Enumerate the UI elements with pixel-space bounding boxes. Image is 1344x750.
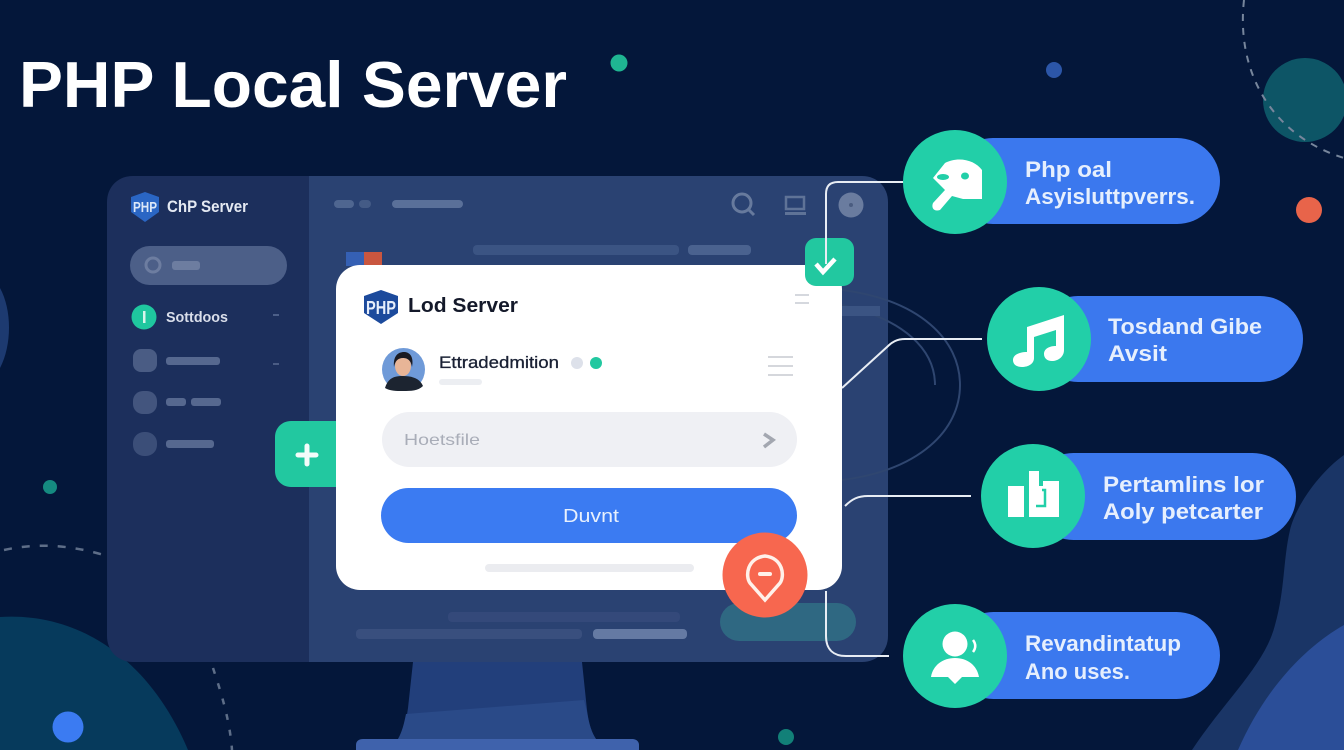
sidebar active item: Sottdoos bbox=[166, 310, 228, 326]
dialog header bbox=[364, 290, 809, 324]
dialog header: Lod Server bbox=[408, 294, 518, 317]
feature pill 3 bbox=[981, 444, 1296, 548]
sidebar brand: ChP Server bbox=[167, 198, 249, 216]
input field bbox=[382, 412, 797, 467]
sidebar search pill bbox=[130, 246, 287, 285]
feature pill 3: Pertamlins lor bbox=[1103, 472, 1264, 497]
top bar placeholders bbox=[334, 200, 751, 255]
bottom placeholders bbox=[356, 603, 856, 641]
sidebar active item bbox=[132, 304, 279, 330]
feature pill 4 bbox=[903, 604, 1220, 708]
feature pill 1: Asyisluttpverrs. bbox=[1025, 184, 1195, 209]
main dialog card bbox=[336, 265, 842, 590]
feature pill 1 bbox=[903, 130, 1220, 234]
warning badge bbox=[722, 532, 808, 618]
feature pill 2: Tosdand Gibe bbox=[1108, 314, 1262, 339]
background circle behind dialog bbox=[842, 290, 960, 480]
feature pill 2 bbox=[987, 287, 1303, 391]
plus badge bbox=[275, 421, 336, 487]
feature pill 2: Avsit bbox=[1108, 341, 1168, 366]
monitor stand bbox=[356, 662, 639, 750]
connector lines bbox=[826, 182, 982, 656]
monitor window bbox=[107, 176, 960, 662]
sidebar brand: PHP bbox=[133, 199, 157, 216]
feature pill 1: Php oal bbox=[1025, 157, 1112, 182]
check badge bbox=[805, 238, 854, 286]
sidebar brand bbox=[131, 192, 249, 222]
dialog header: PHP bbox=[366, 298, 396, 318]
input field: Hoetsfile bbox=[404, 432, 480, 449]
top bar icons bbox=[733, 192, 864, 218]
background window tabs bbox=[346, 252, 382, 266]
primary button bbox=[381, 488, 797, 543]
user row bbox=[382, 348, 793, 391]
primary button: Duvnt bbox=[563, 506, 619, 526]
user row: Ettradedmition bbox=[439, 354, 559, 372]
icon: bars bbox=[1008, 471, 1059, 517]
feature pill 3: Aoly petcarter bbox=[1103, 499, 1263, 524]
sidebar menu items bbox=[133, 349, 279, 456]
icon: music note bbox=[1013, 315, 1064, 367]
feature pill 4: Ano uses. bbox=[1025, 659, 1130, 684]
icon: person bbox=[942, 632, 968, 656]
feature pill 4: Revandintatup bbox=[1025, 631, 1181, 656]
icon: mask bbox=[932, 159, 982, 211]
title: PHP Local Server bbox=[19, 48, 567, 121]
footer placeholder bbox=[485, 564, 694, 572]
